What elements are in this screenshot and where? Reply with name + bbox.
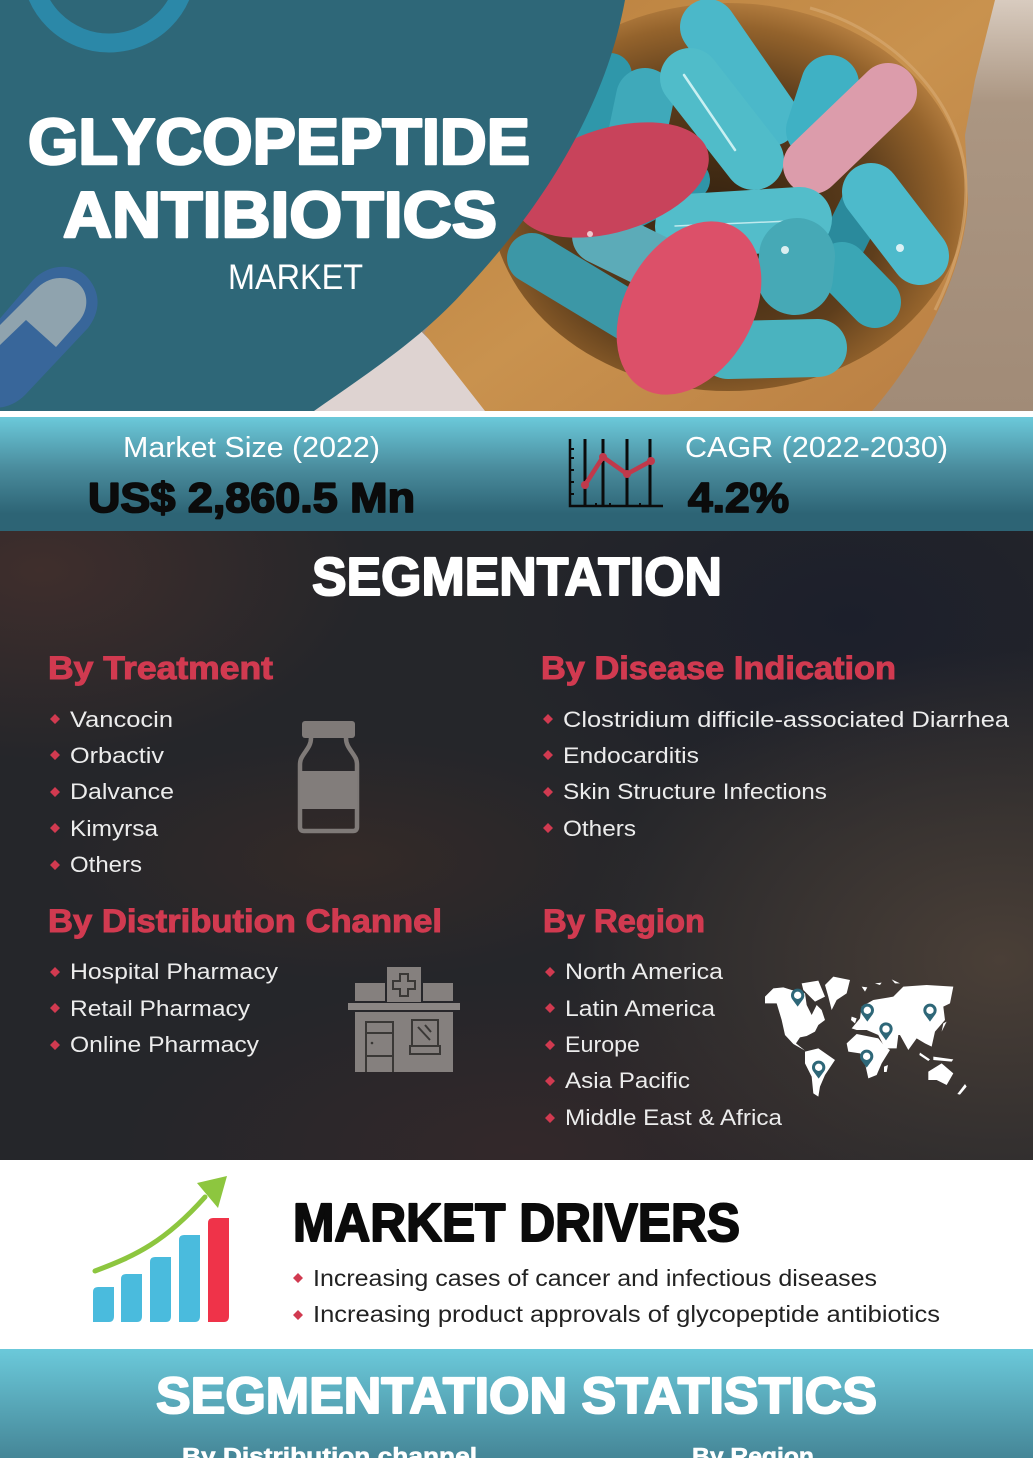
list: by treatment: Vancocin <box>70 707 173 732</box>
metric: market size: Market Size (2022) <box>123 432 380 464</box>
decorative ring <box>31 0 187 43</box>
list: by region: Asia Pacific <box>565 1068 690 1093</box>
band: key metrics <box>0 417 1033 531</box>
list: by region: By Region <box>543 903 705 939</box>
list: by region: Middle East & Africa <box>565 1105 783 1130</box>
panel: market drivers <box>0 1160 1033 1349</box>
list: by disease indication: By Disease Indication <box>541 650 896 686</box>
list: by treatment <box>48 650 273 877</box>
panel: segmentation <box>0 531 1033 1160</box>
list: by distribution channel <box>48 903 442 1057</box>
list: by treatment: By Treatment <box>48 650 273 686</box>
list: by distribution channel: Online Pharmacy <box>70 1032 259 1057</box>
list: drivers: Increasing product approvals of glycopeptide antibiotics <box>313 1301 940 1327</box>
list: by treatment: Kimyrsa <box>70 816 159 841</box>
list: by treatment: Others <box>70 852 142 877</box>
list: by disease indication <box>541 650 1010 841</box>
list: by treatment: Orbactiv <box>70 743 164 768</box>
list: by treatment: Dalvance <box>70 779 174 804</box>
list: by disease indication: Endocarditis <box>563 743 699 768</box>
panel: segmentation statistics <box>0 1349 1033 1458</box>
header panel <box>0 0 625 411</box>
title: ANTIBIOTICS <box>63 178 497 251</box>
list: by distribution channel: By Distribution Channel <box>48 903 442 939</box>
list: by region: Europe <box>565 1032 640 1057</box>
heading: market drivers: MARKET DRIVERS <box>293 1193 740 1253</box>
metric: market size <box>88 432 415 521</box>
title: GLYCOPEPTIDE <box>28 105 530 178</box>
list: by distribution channel: Retail Pharmacy <box>70 996 250 1021</box>
metric: CAGR: 4.2% <box>688 474 789 521</box>
list: by disease indication: Skin Structure Infections <box>563 779 827 804</box>
list: drivers <box>293 1265 940 1327</box>
icon: vial <box>300 721 357 831</box>
metric: market size: US$ 2,860.5 Mn <box>88 474 415 521</box>
list: by region: North America <box>565 959 724 984</box>
title <box>28 105 530 297</box>
title: MARKET <box>228 258 363 297</box>
icon: line chart <box>570 439 663 506</box>
icon: world map with pins <box>765 977 967 1097</box>
heading: segmentation statistics: SEGMENTATION STATISTICS <box>156 1367 877 1424</box>
icon: capsule <box>0 267 98 408</box>
list: by region <box>543 903 783 1130</box>
heading: segmentation: SEGMENTATION <box>312 547 722 607</box>
list: by disease indication: Clostridium difficile-associated Diarrhea <box>563 707 1010 732</box>
photo: pills in a wooden spoon <box>300 0 1033 421</box>
list: by region: Latin America <box>565 996 716 1021</box>
metric: CAGR <box>685 432 948 521</box>
icon: pharmacy building <box>348 967 460 1072</box>
list: by distribution channel: Hospital Pharmacy <box>70 959 278 984</box>
list: drivers: Increasing cases of cancer and infectious diseases <box>313 1265 877 1291</box>
icon: growth bars and arrow <box>93 1176 229 1322</box>
list: by disease indication: Others <box>563 816 636 841</box>
metric: CAGR: CAGR (2022-2030) <box>685 432 948 464</box>
